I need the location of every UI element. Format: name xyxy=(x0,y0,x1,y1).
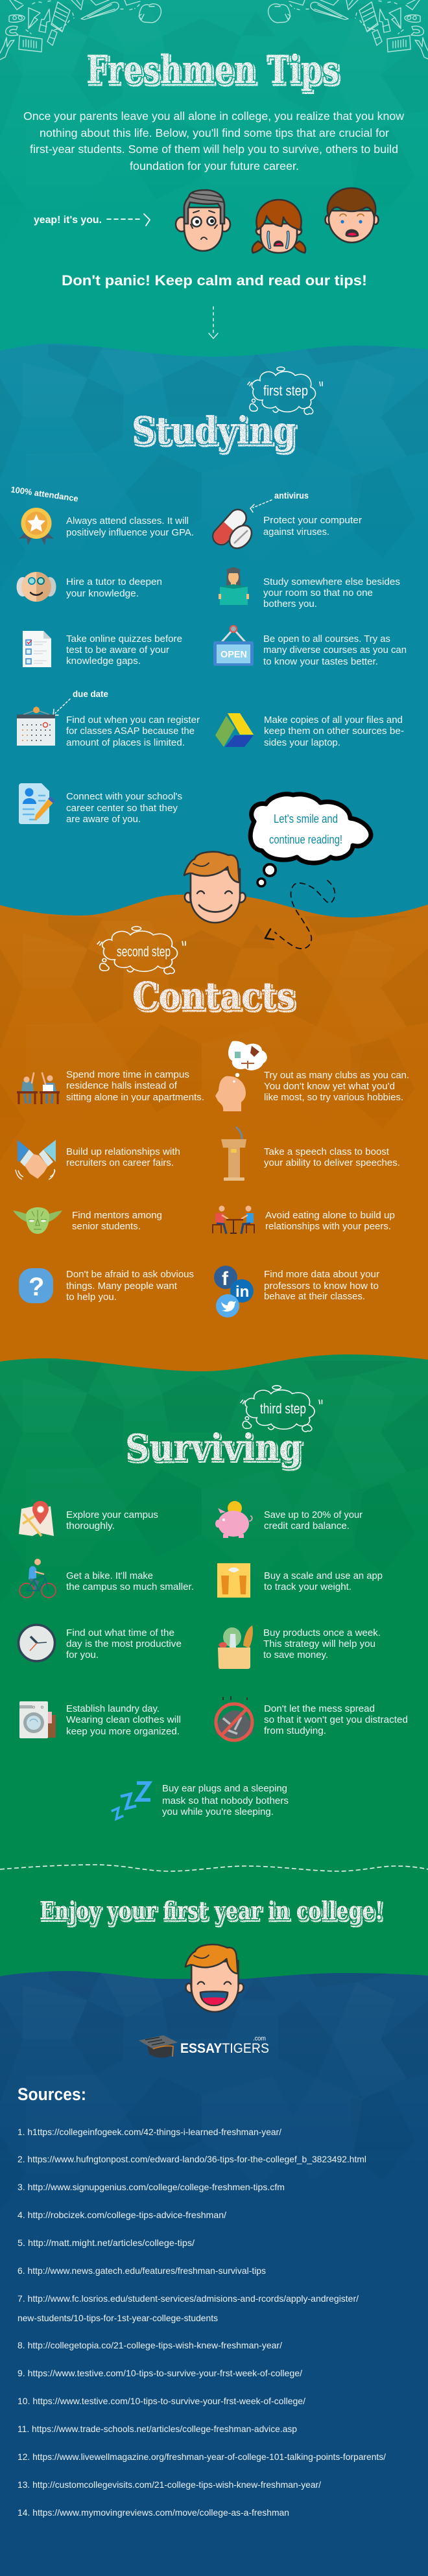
logo: essaytigers: .com xyxy=(253,2035,266,2042)
icon: zzz xyxy=(112,1783,150,1819)
tip: clubs: Try out as many clubs as you can. xyxy=(264,1070,409,1081)
icon: graduation cap xyxy=(139,2035,178,2058)
tip: copies of files: sides your laptop. xyxy=(264,737,340,748)
tip: clubs: You don't know yet what you'd xyxy=(264,1081,395,1092)
list: sources: 3. http://www.signupgenius.com/college/college-freshmen-tips.cfm xyxy=(18,2182,285,2192)
tip: productive time: Find out what time of the xyxy=(66,1627,174,1638)
tip: register early: Find out when you can register xyxy=(66,715,200,726)
tip: weekly shopping xyxy=(218,1625,381,1669)
tip: weekly shopping: This strategy will help you xyxy=(263,1638,375,1649)
tip: residence halls xyxy=(17,1069,204,1104)
tip: scale: Buy a scale and use an app xyxy=(264,1570,383,1581)
list: sources: 9. https://www.testive.com/10-tips-to-survive-your-frst-week-of-college/ xyxy=(18,2368,302,2378)
tip: clubs xyxy=(215,1041,409,1111)
icon: clock xyxy=(18,1625,54,1661)
panel: studying background xyxy=(0,337,428,921)
list: sources: 7. http://www.fc.losrios.edu/student-services/admisions-and-rcords/apply-andregister/ xyxy=(18,2293,359,2304)
tip: speech class: Take a speech class to boost xyxy=(264,1146,390,1157)
icon: social networks: in xyxy=(235,1283,249,1301)
tip: quizzes: knowledge gaps. xyxy=(66,656,141,667)
tip: open to courses: to know your tastes better. xyxy=(263,656,378,667)
icon: worried man xyxy=(176,190,230,251)
icon: grocery bag xyxy=(218,1625,253,1669)
tip: career center: are aware of you. xyxy=(66,814,141,825)
arrow: to pills xyxy=(250,500,272,512)
tip: avoid eating alone xyxy=(213,1206,395,1234)
tip: mentors: senior students. xyxy=(72,1221,141,1232)
icon: open sign xyxy=(213,626,254,666)
list: sources: 6. http://www.news.gatech.edu/features/freshman-survival-tips xyxy=(18,2265,266,2276)
icon: question mark xyxy=(19,1268,53,1303)
tip: save credit: Save up to 20% of your xyxy=(264,1509,363,1520)
tip: scale: to track your weight. xyxy=(264,1581,351,1592)
list: sources xyxy=(18,2127,386,2518)
annotation: 100% attendance: 100% attendance xyxy=(10,484,79,504)
tip: antivirus: Protect your computer xyxy=(263,515,362,526)
intro paragraph: first-year students. Some of them will help you to survive, others to build xyxy=(30,143,398,156)
tip: productive time xyxy=(18,1625,182,1661)
panel: intro background xyxy=(0,0,428,363)
badge: second step cloud: second step xyxy=(117,943,171,960)
arrow: dashed loop to contacts xyxy=(265,880,335,949)
icon: crying girl xyxy=(252,200,305,253)
icon: map pin xyxy=(19,1501,54,1536)
tip: ask questions xyxy=(19,1268,194,1303)
tip: residence halls: sitting alone in your apartments. xyxy=(66,1092,204,1103)
icon: head thinking of hobbies xyxy=(215,1041,267,1111)
icon: laughing student xyxy=(185,1944,244,2012)
annotation: antivirus: antivirus xyxy=(274,491,309,501)
icon: crying boy xyxy=(326,188,379,242)
list: sources: 4. http://robcizek.com/college-tips-advice-freshman/ xyxy=(18,2210,226,2220)
tip: professors data: professors to know how to xyxy=(264,1281,379,1292)
tip: antivirus xyxy=(209,491,362,552)
tip: explore campus xyxy=(19,1501,158,1536)
icon: podium xyxy=(221,1128,246,1181)
icon: yoda xyxy=(13,1207,62,1234)
list: sources: 8. http://collegetopia.co/21-college-tips-wish-knew-freshman-year/ xyxy=(18,2340,282,2350)
tip: ask questions: to help you. xyxy=(66,1292,117,1303)
tip: copies of files xyxy=(215,713,404,748)
tip: tutor: Hire a tutor to deepen xyxy=(66,576,162,587)
tip: laundry: Wearing clean clothes will xyxy=(66,1714,181,1725)
tip: clubs: like most, so try various hobbies. xyxy=(264,1092,403,1103)
tip: copies of files: keep them on other sources be- xyxy=(264,726,404,737)
tip: professors data: Find more data about your xyxy=(264,1269,379,1280)
callout: don't panic: Don't panic! Keep calm and read our tips! xyxy=(62,272,367,289)
tip: professors data xyxy=(214,1266,379,1318)
tip: professors data: behave at their classes. xyxy=(264,1291,365,1302)
list: sources: 13. http://customcollegevisits.com/21-college-tips-wish-knew-freshman-year/ xyxy=(18,2479,321,2490)
tip: attend classes: Always attend classes. It will xyxy=(66,515,189,526)
annotation: due date: due date xyxy=(73,689,108,699)
tip: residence halls: residence halls instead of xyxy=(66,1080,178,1091)
tip: save credit xyxy=(215,1501,363,1538)
heading: studying: Studying xyxy=(132,408,296,453)
arrow: to faces xyxy=(107,214,150,226)
title: Freshmen Tips xyxy=(86,47,339,93)
badge: second step cloud xyxy=(97,927,185,974)
tip: weekly shopping: Buy products once a week. xyxy=(263,1627,381,1638)
panel: sources background xyxy=(0,1971,428,2079)
tip: explore campus: Explore your campus xyxy=(66,1509,158,1520)
tip: study elsewhere: your room so that no one xyxy=(263,587,373,598)
tip: laundry: Establish laundry day. xyxy=(66,1703,160,1714)
heading: contacts: Contacts xyxy=(132,974,295,1018)
tip: attend classes: positively influence your GPA. xyxy=(66,527,194,538)
tip: laundry xyxy=(19,1701,181,1738)
callout: speech cloud: continue reading! xyxy=(269,833,342,846)
tip: speech class xyxy=(221,1128,400,1181)
icon: tutor face xyxy=(17,572,56,602)
tip: speech class: your ability to deliver speeches. xyxy=(264,1157,400,1168)
list: sources: 11. https://www.trade-schools.net/articles/college-freshman-advice.asp xyxy=(18,2424,297,2434)
tip: bike: the campus so much smaller. xyxy=(66,1581,194,1592)
tip: avoid eating alone: Avoid eating alone to build up xyxy=(265,1210,395,1221)
intro paragraph: foundation for your future career. xyxy=(130,160,299,172)
icon: washing machine xyxy=(19,1701,56,1738)
tip: study elsewhere: bothers you. xyxy=(263,598,317,609)
tip: attend classes xyxy=(10,484,194,545)
icon: bathroom scale xyxy=(217,1563,250,1598)
icon: resume and pencil xyxy=(19,783,55,824)
callout: speech cloud: Let's smile and xyxy=(274,812,338,825)
icon: social networks xyxy=(214,1266,254,1318)
tip: career fairs xyxy=(16,1140,180,1179)
heading: surviving: Surviving xyxy=(125,1426,302,1469)
tip: bike xyxy=(19,1559,194,1598)
intro paragraph: nothing about this life. Below, you'll find some tips that are crucial for xyxy=(40,126,389,139)
list: sources: 12. https://www.livewellmagazine.org/freshman-year-of-college-101-talking-points-forparents/ xyxy=(18,2452,386,2462)
tip: quizzes: Take online quizzes before xyxy=(66,633,182,644)
tip: productive time: for you. xyxy=(66,1649,99,1660)
tip: ear plugs: Buy ear plugs and a sleeping xyxy=(162,1783,287,1794)
icon: students at desks xyxy=(17,1073,60,1104)
tip: ask questions: things. Many people want xyxy=(66,1281,178,1292)
tip: laundry: keep you more organized. xyxy=(66,1726,180,1737)
badge: first step cloud: first step xyxy=(263,383,308,399)
heading: sources: Sources: xyxy=(18,2085,86,2104)
icon: no mess sign xyxy=(216,1696,253,1740)
tip: study elsewhere: Study somewhere else besides xyxy=(263,576,400,587)
list: sources: 1. h1ttps://collegeinfogeek.com/42-things-i-learned-freshman-year/ xyxy=(18,2127,281,2137)
tip: tutor: your knowledge. xyxy=(66,588,139,599)
icon: medal xyxy=(19,508,54,545)
arrow: scroll down xyxy=(209,307,218,338)
tip: career fairs: Build up relationships with xyxy=(66,1146,180,1157)
icon: drive logo xyxy=(215,713,254,747)
panel: surviving background xyxy=(0,1352,428,1984)
tip: tutor xyxy=(17,572,162,602)
tip: register early: for classes ASAP because the xyxy=(66,726,195,737)
tip: productive time: day is the most productive xyxy=(66,1638,182,1649)
logo: essaytigers xyxy=(139,2035,269,2058)
icon: pills xyxy=(209,506,256,552)
tip: career fairs: recruiters on career fairs. xyxy=(66,1157,174,1168)
tip: ask questions: Don't be afraid to ask obvious xyxy=(66,1269,194,1280)
icon: quiz sheet xyxy=(23,631,51,667)
tip: ear plugs: mask so that nobody bothers xyxy=(162,1795,289,1806)
badge: third step cloud: third step xyxy=(260,1400,306,1417)
tip: mentors xyxy=(13,1207,162,1234)
icon: smiling student xyxy=(184,852,246,923)
tip: open to courses: many diverse courses as you can xyxy=(263,644,407,656)
list: sources: 10. https://www.testive.com/10-tips-to-survive-your-frst-week-of-college/ xyxy=(18,2396,305,2406)
tip: residence halls: Spend more time in campus xyxy=(66,1069,189,1080)
label: yeap it's you: yeap! it's you. xyxy=(34,215,102,226)
list: sources: 5. http://matt.might.net/articles/college-tips/ xyxy=(18,2238,195,2248)
tip: open to courses: Be open to all courses. Try as xyxy=(263,633,390,644)
icon: question mark: ? xyxy=(29,1273,44,1301)
logo: essaytigers: ESSAYTIGERS xyxy=(180,2041,269,2056)
list: sources: 14. https://www.mymovingreviews.com/move/college-as-a-freshman xyxy=(18,2507,289,2518)
tip: quizzes: test to be aware of your xyxy=(66,644,169,656)
doodles: chalk school supplies left corner xyxy=(0,0,161,60)
doodles: chalk school supplies right corner xyxy=(268,0,428,60)
tip: explore campus: thoroughly. xyxy=(66,1520,115,1531)
tip: mess xyxy=(216,1696,408,1740)
icon: social networks: f xyxy=(222,1268,229,1290)
list: sources: new-students/10-tips-for-1st-year-college-students xyxy=(18,2313,218,2323)
intro paragraph: Once your parents leave you all alone in college, you realize that you know xyxy=(23,110,404,123)
tip: save credit: credit card balance. xyxy=(264,1520,350,1531)
tip: open to courses xyxy=(213,626,407,667)
tip: bike: Get a bike. It'll make xyxy=(66,1570,153,1581)
tip: weekly shopping: to save money. xyxy=(263,1649,328,1660)
tip: scale xyxy=(217,1563,383,1598)
icon: calendar xyxy=(17,707,55,746)
tip: ear plugs: you while you're sleeping. xyxy=(162,1806,274,1817)
panel: contacts background xyxy=(0,892,428,1378)
tip: career center: Connect with your school's xyxy=(66,791,182,802)
icon: two people at table xyxy=(213,1206,254,1234)
icon: open sign: OPEN xyxy=(220,649,247,660)
tip: mess: Don't let the mess spread xyxy=(264,1703,375,1714)
tip: mess: from studying. xyxy=(264,1725,326,1736)
icon: cyclist xyxy=(19,1559,56,1598)
tip: quizzes xyxy=(23,631,182,667)
list: sources: 2. https://www.hufngtonpost.com/edward-lando/36-tips-for-the-collegef_b_3823492.html xyxy=(18,2154,366,2164)
icon: piggy bank xyxy=(215,1501,252,1538)
tip: mess: so that it won't get you distracted xyxy=(264,1714,408,1725)
tip: mentors: Find mentors among xyxy=(72,1210,162,1221)
icon: handshake xyxy=(16,1140,56,1179)
badge: third step cloud xyxy=(241,1386,322,1432)
tip: career center: career center so that they xyxy=(66,803,178,814)
badge: first step cloud xyxy=(248,367,322,414)
tip: ear plugs xyxy=(112,1783,289,1819)
tip: study elsewhere xyxy=(219,567,400,609)
tip: avoid eating alone: relationships with your peers. xyxy=(265,1221,391,1232)
callout: speech cloud xyxy=(250,794,371,886)
tip: career center xyxy=(19,783,182,825)
intro paragraph xyxy=(23,110,404,172)
icon: girl reading xyxy=(219,567,249,605)
tip: copies of files: Make copies of all your files and xyxy=(264,715,403,726)
tip: antivirus: against viruses. xyxy=(263,526,329,538)
tip: register early: amount of places is limited. xyxy=(66,737,185,748)
arrow: to calendar xyxy=(53,699,70,715)
tip: register early xyxy=(17,689,200,748)
